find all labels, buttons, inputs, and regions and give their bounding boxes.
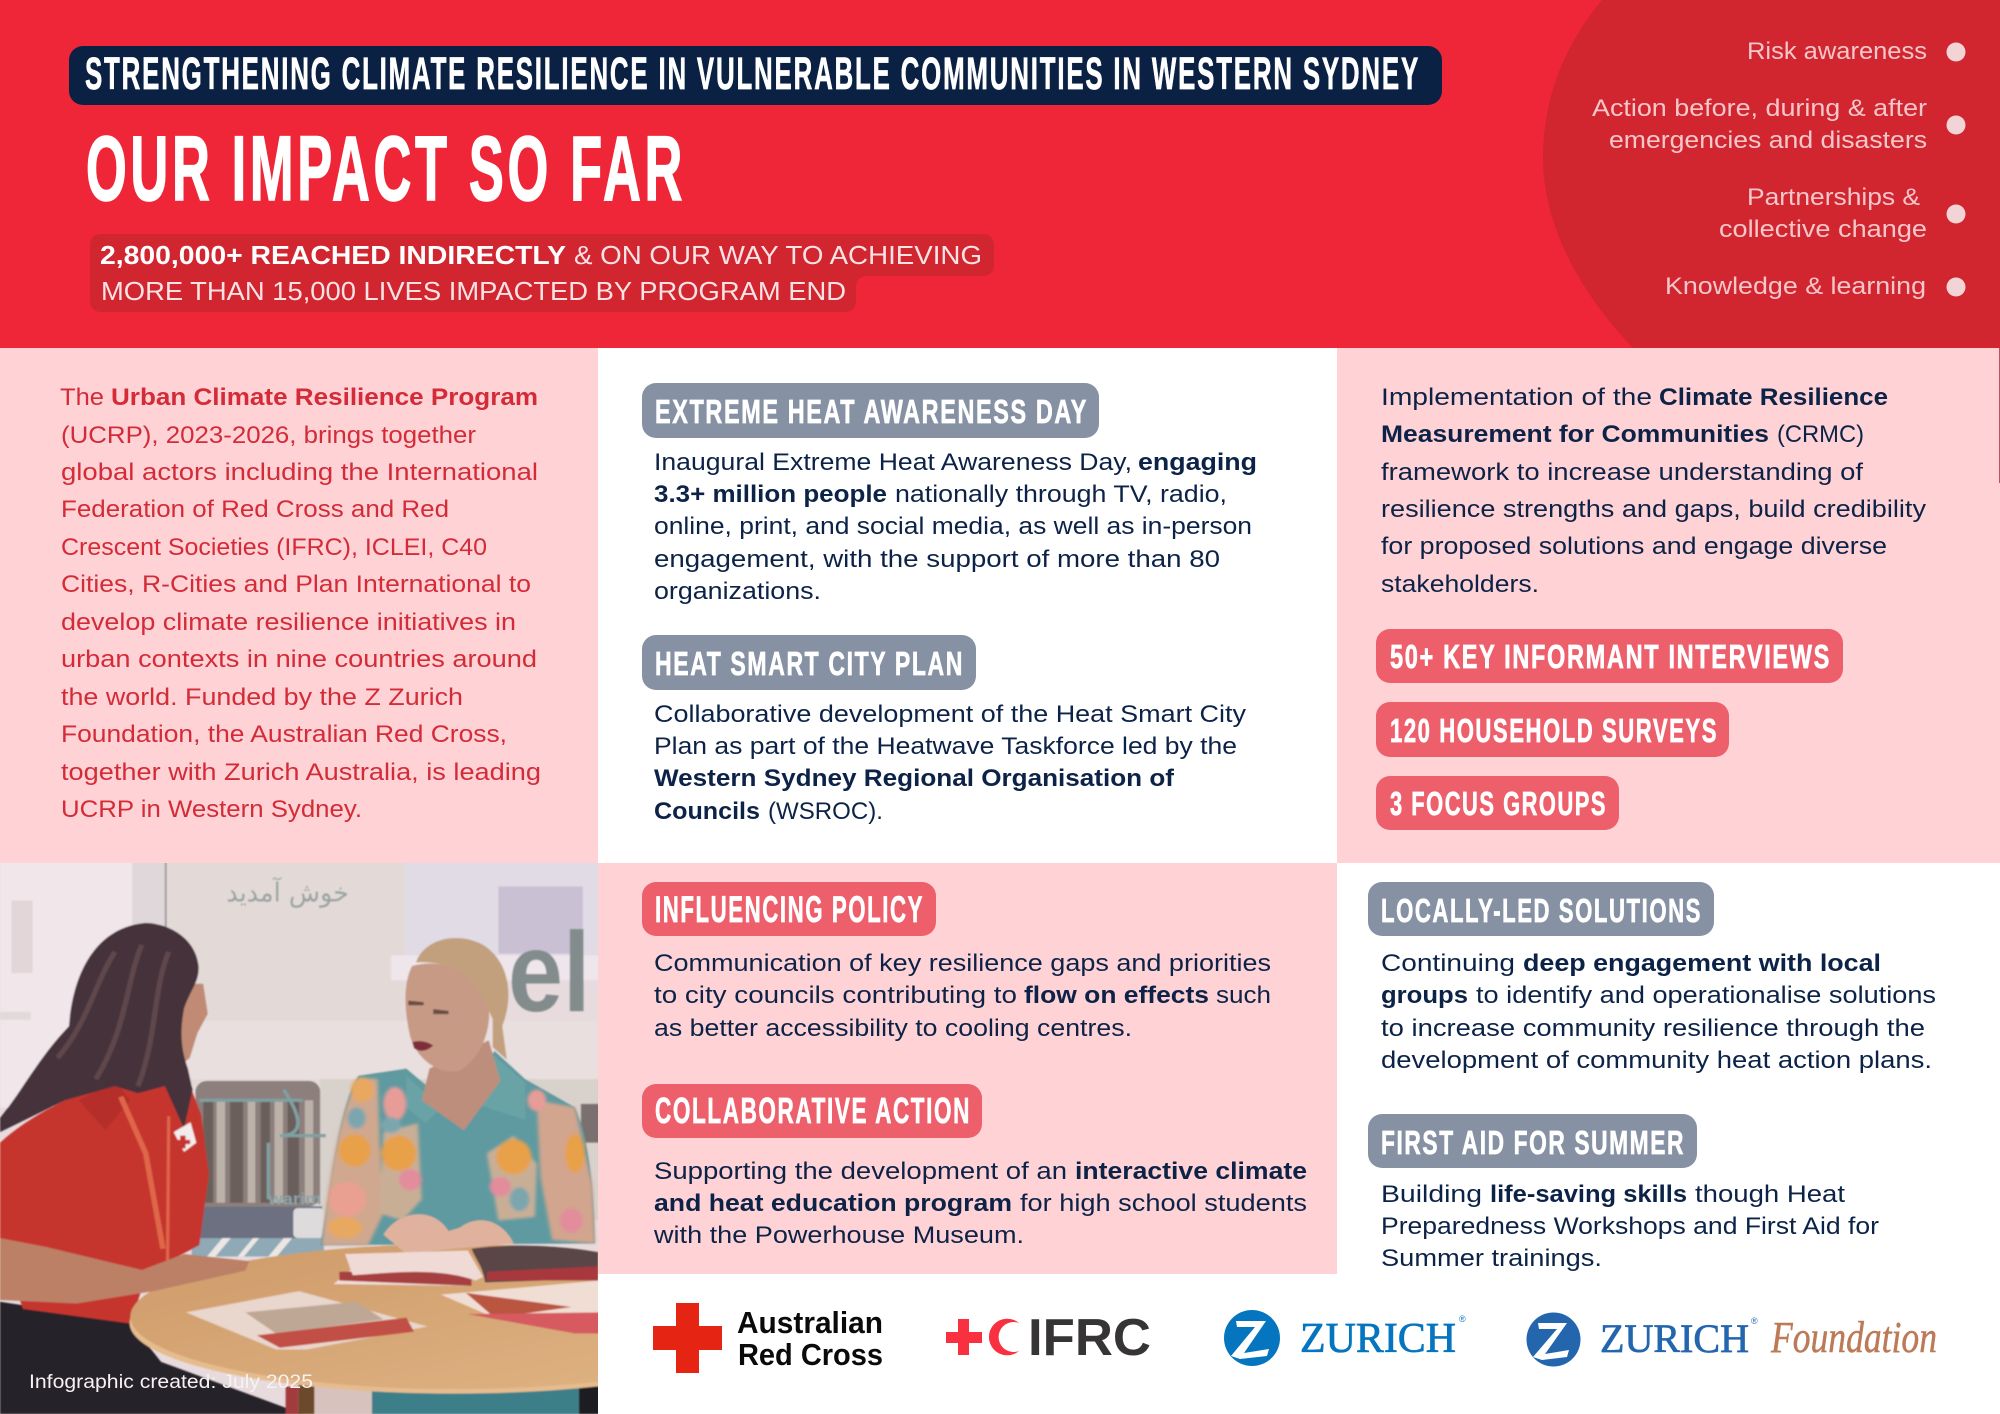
pillar: action before during and after: Action before, during & after bbox=[1592, 95, 1927, 122]
tag: heat smart city plan: HEAT SMART CITY PLAN bbox=[655, 645, 964, 682]
text: influencing policy: to city councils contributing to bbox=[654, 982, 1017, 1009]
stat: focus groups bbox=[1376, 776, 1619, 830]
tag: extreme heat awareness day: EXTREME HEAT AWARENESS DAY bbox=[655, 393, 1088, 430]
text: heat smart city plan: Collaborative development of the Heat Smart City bbox=[654, 701, 1247, 728]
text: CRMC framework: resilience strengths and gaps, build credibility bbox=[1381, 496, 1927, 523]
tag: influencing policy bbox=[642, 882, 936, 936]
stat: key informant interviews bbox=[1376, 629, 1843, 683]
panel: heat awareness and plan bbox=[598, 348, 1337, 863]
tag: first aid for summer bbox=[1368, 1114, 1697, 1168]
text: locally-led solutions: development of community heat action plans. bbox=[1381, 1047, 1932, 1074]
sign lettering on glass bbox=[227, 876, 584, 1013]
panel: program description: Urban Climate Resilience Program bbox=[111, 384, 538, 411]
panel: resilience measurement bbox=[1337, 348, 2000, 863]
open magazine and brochures bbox=[186, 1246, 600, 1349]
text: CRMC framework: framework to increase understanding of bbox=[1381, 459, 1863, 486]
text: first aid for summer: Building bbox=[1381, 1181, 1482, 1208]
text: CRMC framework: Implementation of the bbox=[1381, 384, 1652, 411]
main heading: OUR IMPACT SO FAR bbox=[86, 118, 686, 220]
text: first aid for summer: Summer trainings. bbox=[1381, 1245, 1602, 1272]
text: CRMC framework: Measurement for Communities bbox=[1381, 421, 1769, 448]
striped stool and floor: warim bbox=[267, 1189, 322, 1208]
text: CRMC framework: for proposed solutions and engage diverse bbox=[1381, 533, 1887, 560]
tag: locally-led solutions: LOCALLY-LED SOLUTIONS bbox=[1381, 892, 1702, 929]
text: collaborative action: interactive climate bbox=[1075, 1158, 1307, 1185]
pillar: action before during and after: emergencies and disasters bbox=[1609, 127, 1927, 154]
text: extreme heat awareness day: online, print, and social media, as well as in-person bbox=[654, 513, 1252, 540]
sign lettering on glass: خوش آمدید bbox=[226, 877, 349, 908]
text: locally-led solutions: deep engagement with local bbox=[1523, 950, 1881, 977]
reach statement: MORE THAN 15,000 LIVES IMPACTED BY PROGRAM END bbox=[101, 276, 846, 306]
logo: Zurich Foundation bbox=[1526, 1312, 1937, 1366]
text: extreme heat awareness day bbox=[654, 449, 1257, 605]
text: collaborative action bbox=[653, 1158, 1307, 1249]
tag: collaborative action: COLLABORATIVE ACTION bbox=[655, 1090, 971, 1131]
text: collaborative action: for high school students bbox=[1020, 1190, 1307, 1217]
forearm and hands bbox=[0, 1214, 514, 1304]
text: CRMC framework: stakeholders. bbox=[1381, 571, 1539, 598]
stat: focus groups: 3 FOCUS GROUPS bbox=[1390, 785, 1607, 822]
logo: Zurich Foundation: ® bbox=[1751, 1316, 1758, 1326]
wall and windows bbox=[0, 860, 600, 1220]
pillar: partnerships bbox=[1719, 184, 1966, 243]
panel: program description: together with Zurich Australia, is leading bbox=[61, 759, 541, 786]
text: locally-led solutions: groups bbox=[1381, 982, 1468, 1009]
tag: heat smart city plan bbox=[642, 635, 976, 690]
text: heat smart city plan: Councils bbox=[654, 798, 760, 825]
text: heat smart city plan: Plan as part of the Heatwave Taskforce led by the bbox=[654, 733, 1237, 760]
pillars arc panel bbox=[1543, 0, 2000, 348]
panel: program description: Crescent Societies (IFRC), ICLEI, C40 bbox=[61, 534, 487, 561]
reach statement bbox=[90, 234, 994, 312]
panel: policy and action bbox=[598, 863, 1337, 1274]
logo: Zurich: ® bbox=[1459, 1314, 1466, 1324]
panel: program description: (UCRP), 2023-2026, brings together bbox=[61, 422, 476, 449]
text: first aid for summer: though Heat bbox=[1695, 1181, 1845, 1208]
panel: program description: global actors including the International bbox=[61, 459, 538, 486]
text: heat smart city plan bbox=[654, 701, 1247, 825]
text: influencing policy: such bbox=[1216, 982, 1271, 1009]
pillar: action before during and after bbox=[1592, 95, 1966, 154]
panel: program description: develop climate resilience initiatives in bbox=[61, 609, 516, 636]
text: first aid for summer: Preparedness Workshops and First Aid for bbox=[1381, 1213, 1879, 1240]
figure: seated woman in floral blouse bbox=[286, 938, 600, 1414]
text: locally-led solutions: Continuing bbox=[1381, 950, 1515, 977]
text: locally-led solutions bbox=[1381, 950, 1936, 1074]
stat: key informant interviews: 50+ KEY INFORMANT INTERVIEWS bbox=[1390, 638, 1831, 675]
sign lettering on glass: el bbox=[508, 910, 590, 1036]
text: first aid for summer: life-saving skills bbox=[1490, 1181, 1687, 1208]
panel: program description: the world. Funded by the Z Zurich bbox=[61, 684, 463, 711]
text: extreme heat awareness day: Inaugural Extreme Heat Awareness Day, bbox=[654, 449, 1132, 476]
text: extreme heat awareness day: 3.3+ million people bbox=[654, 481, 887, 508]
tag: collaborative action bbox=[642, 1084, 982, 1138]
logo: Zurich: ZURICH bbox=[1300, 1316, 1456, 1362]
panel: program description: Cities, R-Cities and Plan International to bbox=[61, 571, 531, 598]
text: influencing policy: flow on effects bbox=[1024, 982, 1209, 1009]
text: locally-led solutions: to identify and operationalise solutions bbox=[1476, 982, 1936, 1009]
panel: program description bbox=[0, 348, 598, 863]
infographic date credit: Infographic created: July 2025 bbox=[29, 1371, 313, 1393]
panel: program description: urban contexts in nine countries around bbox=[61, 646, 537, 673]
panel: program description: UCRP in Western Sydney. bbox=[61, 796, 362, 823]
tag: extreme heat awareness day bbox=[642, 383, 1099, 438]
text: collaborative action: Supporting the development of an bbox=[654, 1158, 1067, 1185]
text: CRMC framework: Climate Resilience bbox=[1659, 384, 1888, 411]
text: heat smart city plan: Western Sydney Regional Organisation of bbox=[654, 765, 1175, 792]
logo: Australian Red Cross: Red Cross bbox=[738, 1337, 883, 1372]
logo: IFRC: IFRC bbox=[1028, 1309, 1151, 1367]
reach statement: 2,800,000+ REACHED INDIRECTLY bbox=[100, 240, 566, 270]
logo: Australian Red Cross: Australian bbox=[737, 1305, 883, 1340]
text: CRMC framework bbox=[1381, 384, 1927, 598]
tag: locally-led solutions bbox=[1368, 882, 1714, 936]
logo: IFRC bbox=[946, 1309, 1151, 1367]
panel: local solutions and first aid bbox=[1337, 863, 2000, 1274]
pillar: partnerships: collective change bbox=[1719, 216, 1927, 243]
text: first aid for summer bbox=[1381, 1181, 1879, 1272]
title pill bbox=[69, 46, 1442, 105]
text: extreme heat awareness day: nationally through TV, radio, bbox=[895, 481, 1227, 508]
logo: Zurich bbox=[1224, 1310, 1466, 1366]
text: extreme heat awareness day: engagement, with the support of more than 80 bbox=[654, 546, 1220, 573]
tag: first aid for summer: FIRST AID FOR SUMMER bbox=[1381, 1124, 1685, 1161]
logo: Zurich Foundation: Foundation bbox=[1770, 1313, 1937, 1362]
logo: Australian Red Cross bbox=[653, 1303, 883, 1373]
stat: household surveys: 120 HOUSEHOLD SURVEYS bbox=[1390, 712, 1718, 749]
pillar: risk awareness: Risk awareness bbox=[1747, 38, 1927, 65]
round table bbox=[128, 1244, 598, 1395]
panel: program description: The bbox=[60, 384, 104, 411]
panel: program description: Foundation, the Australian Red Cross, bbox=[61, 721, 507, 748]
text: CRMC framework: (CRMC) bbox=[1777, 421, 1864, 448]
text: collaborative action: and heat education program bbox=[654, 1190, 1012, 1217]
text: extreme heat awareness day: organizations. bbox=[654, 578, 821, 605]
photo: two women reading brochures at a table bbox=[0, 863, 598, 1414]
text: locally-led solutions: to increase community resilience through the bbox=[1381, 1015, 1925, 1042]
stat: household surveys bbox=[1376, 702, 1729, 757]
header band bbox=[0, 0, 2000, 348]
tag: influencing policy: INFLUENCING POLICY bbox=[655, 889, 924, 930]
reach statement: & ON OUR WAY TO ACHIEVING bbox=[574, 240, 982, 270]
pillar: partnerships: Partnerships & bbox=[1747, 184, 1920, 211]
text: extreme heat awareness day: engaging bbox=[1138, 449, 1257, 476]
striped stool and floor bbox=[192, 1081, 600, 1257]
text: influencing policy: Communication of key resilience gaps and priorities bbox=[654, 950, 1271, 977]
text: influencing policy: as better accessibility to cooling centres. bbox=[654, 1015, 1132, 1042]
figure: seated woman in red polo bbox=[0, 923, 303, 1414]
text: heat smart city plan: (WSROC). bbox=[768, 798, 883, 825]
pillar: knowledge and learning: Knowledge & learning bbox=[1665, 273, 1926, 300]
text: collaborative action: with the Powerhouse Museum. bbox=[653, 1222, 1024, 1249]
text: influencing policy bbox=[654, 950, 1271, 1042]
panel: program description: Federation of Red Cross and Red bbox=[61, 496, 449, 523]
logo: Zurich Foundation: ZURICH bbox=[1600, 1316, 1749, 1361]
